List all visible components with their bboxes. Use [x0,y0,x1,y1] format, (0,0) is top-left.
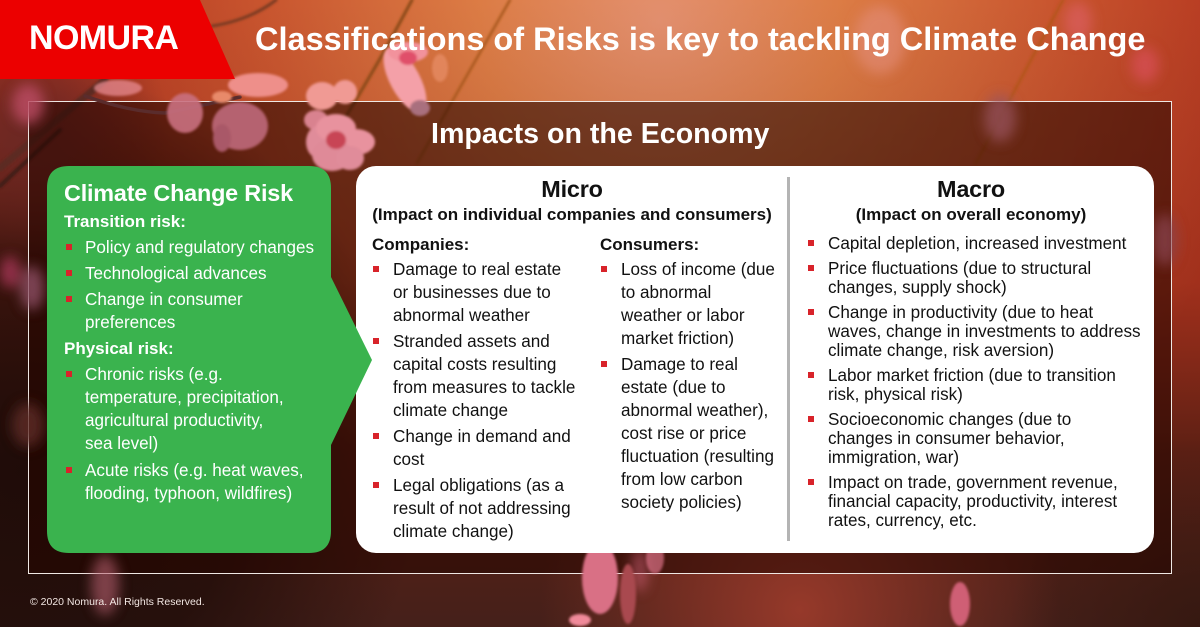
list: physical risks [66,365,304,503]
list: companies: Stranded assets and [393,332,550,351]
list: consumers: from low carbon [621,470,743,489]
list: physical risks: temperature, precipitation, [85,388,284,407]
list: companies: cost [393,450,424,469]
list: physical risks: agricultural productivity, [85,411,263,430]
frame: impacts on the economy [28,101,1172,574]
panel heading: Climate Change Risk [64,180,293,206]
list: physical risks: Chronic risks (e.g. [85,365,223,384]
title: Classifications of Risks is key to tackling Climate Change [255,21,1145,57]
list: transition risks: Policy and regulatory changes [85,238,314,257]
list: macro impacts: Price fluctuations (due to structural [828,259,1091,278]
list: consumers: cost rise or price [621,424,746,443]
panel: micro and macro impacts [356,166,1154,553]
list: companies: Legal obligations (as a [393,476,564,495]
red logo banner [0,0,235,79]
list: companies: from measures to tackle [393,378,575,397]
list: companies: or businesses due to [393,283,551,302]
list: macro impacts: immigration, war) [828,448,959,467]
list: consumers: abnormal weather), [621,401,768,420]
list: companies: climate change) [393,522,514,541]
list: companies: result of not addressing [393,499,571,518]
list: macro impacts: Socioeconomic changes (due to [828,410,1071,429]
list: macro impacts: financial capacity, productivity, interest [828,492,1117,511]
list: transition risks [66,238,314,332]
list: consumers: estate (due to [621,378,726,397]
logo: Nomura: NOMURA [29,19,178,57]
list: physical risks: sea level) [85,434,158,453]
heading: impacts on the economy: Impacts on the Economy [431,118,769,150]
list: physical risks: flooding, typhoon, wildfires) [85,484,292,503]
list: companies: Change in demand and [393,427,571,446]
list: consumers: market friction) [621,329,734,348]
list: macro impacts: waves, change in investments to address [828,322,1141,341]
subheading: micro scope: (Impact on individual companies and consumers) [372,205,772,224]
subheading: physical risk: Physical risk: [64,339,174,358]
list: consumers: to abnormal [621,283,711,302]
list: consumers [601,260,775,512]
panel: climate change risk [47,166,372,553]
heading: macro: Macro [937,176,1005,202]
list: transition risks: preferences [85,313,175,332]
list: companies: climate change [393,401,508,420]
list: macro impacts: rates, currency, etc. [828,511,977,530]
list: macro impacts: climate change, risk aversion) [828,341,1054,360]
list: companies: abnormal weather [393,306,530,325]
list: macro impacts [808,234,1141,530]
list: physical risks: Acute risks (e.g. heat waves, [85,461,304,480]
list: companies: Damage to real estate [393,260,561,279]
list: consumers: fluctuation (resulting [621,447,774,466]
copyright note: © 2020 Nomura. All Rights Reserved. [30,596,205,608]
list: macro impacts: Change in productivity (due to heat [828,303,1093,322]
list: macro impacts: Capital depletion, increased investment [828,234,1126,253]
list: companies [373,260,575,541]
subheading: consumers: Consumers: [600,235,699,254]
list: macro impacts: changes, supply shock) [828,278,1007,297]
heading: micro: Micro [541,176,603,202]
subheading: macro scope: (Impact on overall economy) [856,205,1086,224]
list: consumers: Damage to real [621,355,738,374]
list: consumers: society policies) [621,493,742,512]
list: macro impacts: Labor market friction (due to transition [828,366,1116,385]
subheading: companies: Companies: [372,235,469,254]
list: macro impacts: Impact on trade, government revenue, [828,473,1118,492]
list: transition risks: Change in consumer [85,290,243,309]
list: consumers: weather or labor [621,306,745,325]
list: macro impacts: risk, physical risk) [828,385,963,404]
subheading: transition risk: Transition risk: [64,212,186,231]
list: companies: capital costs resulting [393,355,556,374]
list: macro impacts: changes in consumer behavior, [828,429,1065,448]
list: transition risks: Technological advances [85,264,267,283]
list: consumers: Loss of income (due [621,260,775,279]
